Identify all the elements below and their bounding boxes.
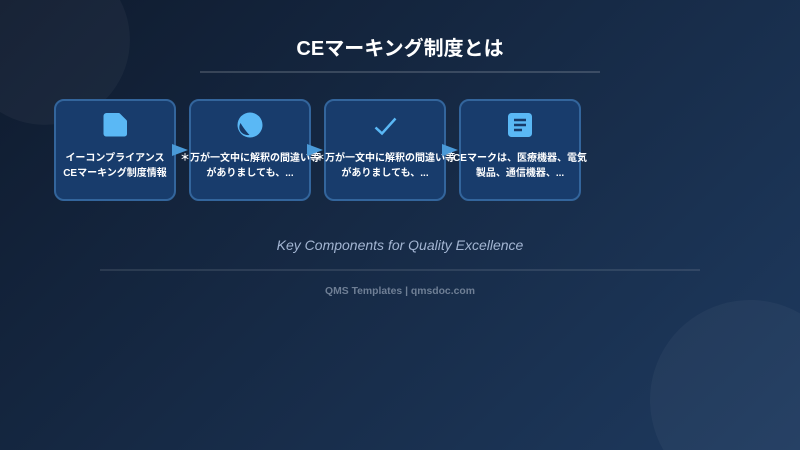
arrow: step 3 to 4 [442, 144, 458, 156]
panel: step 3 [324, 99, 446, 201]
text: step 3 [315, 152, 455, 179]
icon: document [104, 113, 127, 136]
panel: step 1 [54, 99, 176, 201]
subtitle: Key Components for Quality Excellence [277, 237, 523, 253]
arrow: step 1 to 2 [172, 144, 188, 156]
title: CEマーキング制度とは [296, 38, 504, 60]
text: step 1 [63, 152, 167, 179]
text: step 2: がありましても、... [206, 168, 294, 179]
text: step 2 [180, 152, 320, 179]
text: step 1: イーコンプライアンス [65, 153, 165, 164]
panel: step 4 [459, 99, 581, 201]
icon: text document [508, 113, 532, 137]
arrow: step 2 to 3 [307, 144, 323, 156]
text: step 3: がありましても、... [341, 168, 429, 179]
text: step 4 [453, 152, 587, 179]
divider [100, 269, 700, 271]
icon: check mark [374, 118, 396, 136]
title underline [200, 71, 600, 73]
text: step 1: CEマーキング制度情報 [63, 168, 167, 179]
icon: disc [238, 112, 262, 138]
text: step 4: CEマークは、医療機器、電気 [453, 153, 587, 164]
text: step 2: ＊万が一文中に解釈の間違い等 [180, 153, 320, 164]
text: step 3: ＊万が一文中に解釈の間違い等 [315, 153, 455, 164]
text: step 4: 製品、通信機器、... [476, 168, 564, 179]
footer credit: QMS Templates | qmsdoc.com [325, 286, 475, 297]
panel: step 2 [189, 99, 311, 201]
